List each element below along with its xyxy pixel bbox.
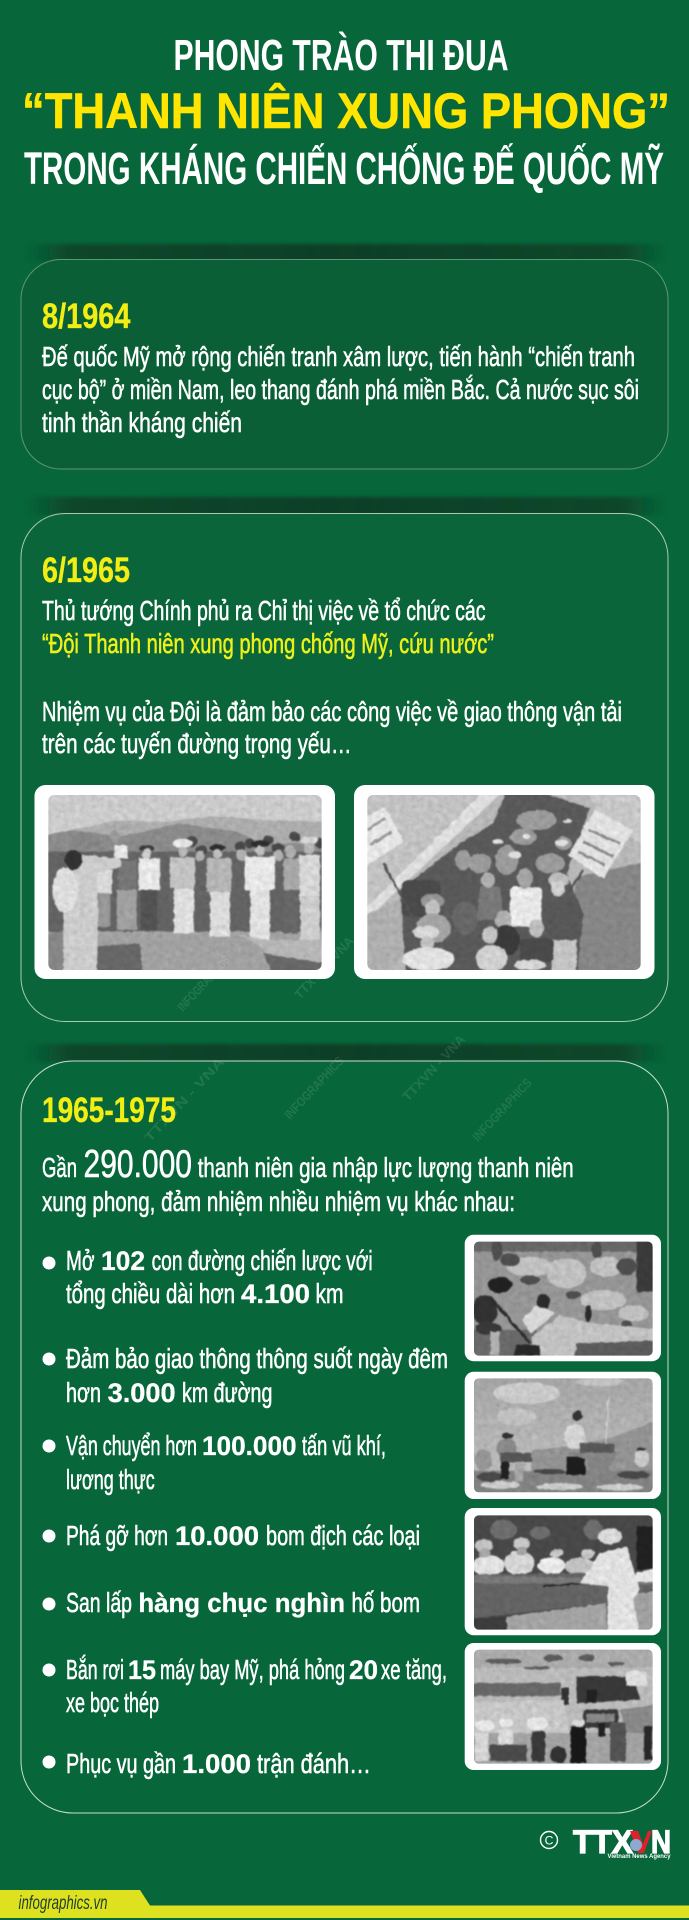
bullet: bomb craters bbox=[42, 1587, 420, 1618]
mission text: trên các tuyến đường trọng yếu… bbox=[42, 728, 352, 759]
directive text: “Đội Thanh niên xung phong chống Mỹ, cứu nước” bbox=[42, 628, 494, 659]
photo: marching youth with signs bbox=[354, 782, 654, 983]
bullet: 102 roads: 4.100 bbox=[241, 1279, 310, 1309]
photo: wheelbarrows bbox=[464, 1372, 661, 1499]
bullet: 100.000 tons: Vận chuyển hơn bbox=[66, 1430, 197, 1461]
text block 8/1964 bbox=[42, 341, 639, 438]
bullet: bomb craters: hố bom bbox=[352, 1587, 420, 1618]
bullet: 3.000 km: Đảm bảo giao thông thông suốt ngày đêm bbox=[66, 1343, 448, 1374]
bullet: 100.000 tons: lương thực bbox=[66, 1464, 155, 1495]
bullet: 10.000 bombs bbox=[42, 1520, 420, 1551]
bullet: planes and tanks: 20 bbox=[349, 1655, 378, 1685]
bullet: 102 roads: 102 bbox=[101, 1246, 145, 1276]
bullet: planes and tanks bbox=[42, 1654, 447, 1718]
bullet: 3.000 km: 3.000 bbox=[108, 1378, 176, 1408]
bullet: 10.000 bombs: Phá gỡ hơn bbox=[66, 1520, 168, 1551]
mission text bbox=[42, 696, 622, 759]
watermarks: INFOGRAPHICS bbox=[469, 1075, 535, 1144]
bullet: 102 roads bbox=[42, 1245, 373, 1309]
site name: infographics.vn bbox=[18, 1893, 108, 1914]
bullet: 1.000 battles: Phục vụ gần bbox=[66, 1748, 176, 1779]
bullet: 1.000 battles: 1.000 bbox=[182, 1749, 251, 1779]
photo: youth brigade line-up bbox=[34, 782, 335, 983]
photo: breaking rock bbox=[464, 1234, 661, 1362]
watermarks: TTXVN - VNA bbox=[291, 933, 357, 1002]
bullet: planes and tanks: xe bọc thép bbox=[66, 1687, 159, 1718]
date 6/1965: 6/1965 bbox=[42, 551, 130, 590]
watermarks: INFOGRAPHICS bbox=[174, 952, 233, 1014]
bullet: bomb craters: hàng chục nghìn bbox=[138, 1588, 345, 1618]
bullet: 102 roads: Mở bbox=[66, 1245, 94, 1276]
intro text: thanh niên gia nhập lực lượng thanh niên bbox=[198, 1152, 574, 1183]
bullet: planes and tanks: máy bay Mỹ, phá hỏng bbox=[160, 1654, 345, 1685]
bullet: 1.000 battles: trận đánh… bbox=[257, 1748, 371, 1779]
intro text bbox=[42, 1143, 574, 1217]
panel: 1965-1975 bbox=[21, 1061, 668, 1813]
date 1965-1975: 1965-1975 bbox=[42, 1091, 176, 1130]
bullet: planes and tanks: 15 bbox=[128, 1655, 156, 1685]
text block 8/1964: tinh thần kháng chiến bbox=[42, 407, 242, 438]
photo: sawing bbox=[464, 1508, 661, 1636]
bullet: 10.000 bombs: bom địch các loại bbox=[266, 1520, 420, 1551]
intro text: 290.000 bbox=[84, 1143, 192, 1186]
bullet: 3.000 km: km đường bbox=[182, 1377, 272, 1408]
panel: 6/1965 bbox=[21, 514, 668, 1022]
bullet: 3.000 km: hơn bbox=[66, 1377, 101, 1408]
bullet: planes and tanks: Bắn rơi bbox=[66, 1654, 124, 1685]
intro text: Gần bbox=[42, 1152, 77, 1183]
bullet: 10.000 bombs: 10.000 bbox=[175, 1521, 259, 1551]
watermarks bbox=[141, 933, 535, 1145]
bullet: 100.000 tons bbox=[42, 1430, 386, 1495]
footer bar bbox=[0, 1890, 689, 1918]
watermarks: TTXVN - VNA bbox=[399, 1031, 469, 1104]
intro text: xung phong, đảm nhiệm nhiều nhiệm vụ khác nhau: bbox=[42, 1186, 515, 1217]
directive text bbox=[42, 595, 494, 659]
copyright and TTXVN logo: TTX bbox=[573, 1824, 634, 1860]
copyright and TTXVN logo: C bbox=[545, 1834, 554, 1848]
bullet: 102 roads: km bbox=[316, 1278, 344, 1309]
copyright and TTXVN logo bbox=[540, 1824, 671, 1860]
copyright and TTXVN logo: Vietnam News Agency bbox=[608, 1853, 671, 1860]
copyright and TTXVN logo: N bbox=[651, 1824, 671, 1860]
bullet: 100.000 tons: tấn vũ khí, bbox=[302, 1430, 386, 1461]
bullet: planes and tanks: xe tăng, bbox=[381, 1654, 447, 1685]
bullet: bomb craters: San lấp bbox=[66, 1587, 132, 1618]
bullet: 3.000 km bbox=[42, 1343, 448, 1408]
watermarks: INFOGRAPHICS bbox=[281, 1053, 347, 1122]
title: PHONG TRÀO THI ĐUA bbox=[174, 30, 508, 80]
title bbox=[22, 30, 670, 194]
panel: 8/1964 bbox=[21, 260, 668, 469]
directive text: Thủ tướng Chính phủ ra Chỉ thị việc về tổ chức các bbox=[42, 595, 486, 626]
photo: work site bbox=[464, 1643, 661, 1770]
bullet: 102 roads: tổng chiều dài hơn bbox=[66, 1278, 235, 1309]
watermarks: TTXVN - VNA bbox=[141, 1054, 228, 1145]
date 8/1964: 8/1964 bbox=[42, 297, 131, 336]
bullet: 102 roads: con đường chiến lược với bbox=[152, 1245, 373, 1276]
bullet: 1.000 battles bbox=[42, 1748, 371, 1779]
bullet: 100.000 tons: 100.000 bbox=[202, 1431, 297, 1461]
